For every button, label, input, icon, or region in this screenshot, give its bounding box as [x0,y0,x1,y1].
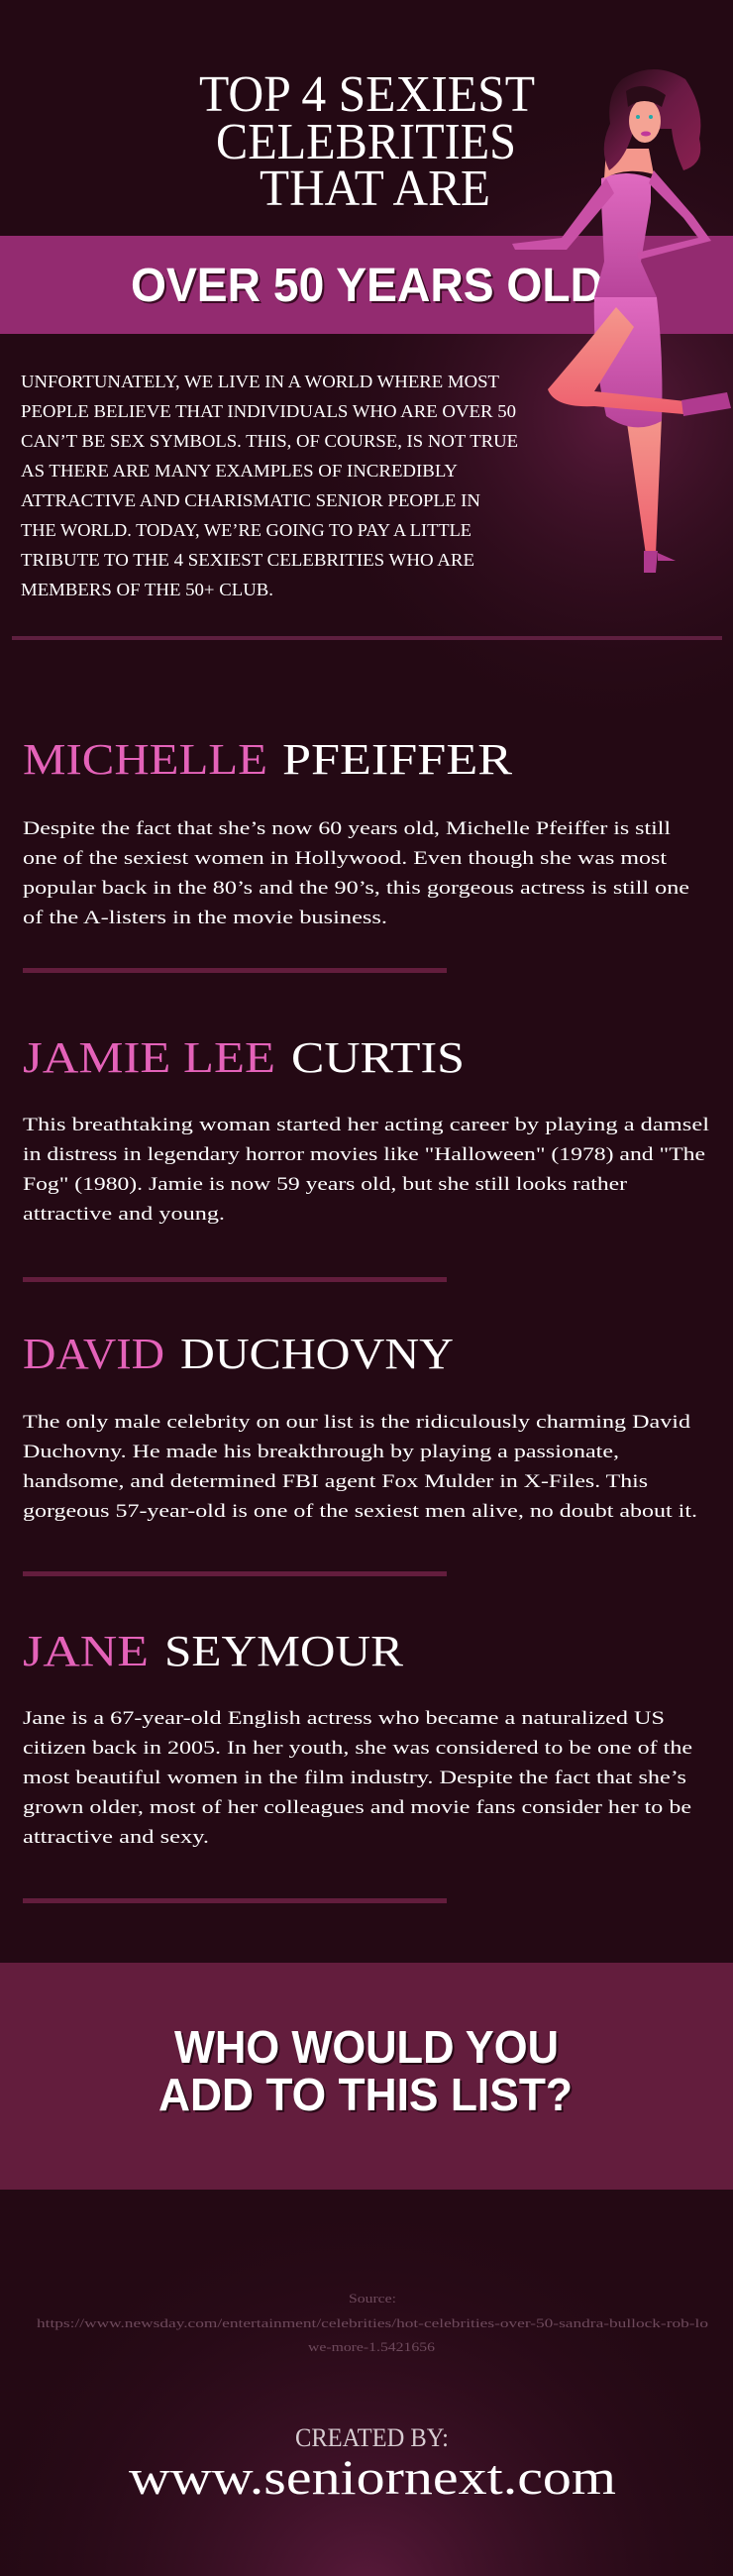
source: Source: [349,2291,396,2306]
body: Jane: most beautiful women in the film industry. Despite the fact that she’s [23,1768,686,1788]
section: Michelle Pfeiffer [23,735,689,928]
body: Jamie: Fog" (1980). Jamie is now 59 years old, but she still looks rather [23,1174,628,1195]
heading: Jamie Lee Curtis [23,1033,465,1082]
body: Jamie: in distress in legendary horror movies like "Halloween" (1978) and "The [23,1144,705,1165]
title: TOP 4 SEXIEST [199,66,535,123]
skirt [594,297,662,427]
chest skin [604,149,654,178]
body: Jane: grown older, most of her colleagues and movie fans consider her to be [23,1797,691,1818]
body: Jamie: attractive and young. [23,1204,225,1225]
subtitle band: OVER 50 YEARS OLD [131,260,603,312]
body: Jane [23,1708,692,1848]
section: Jane Seymour [23,1627,692,1848]
title: THAT ARE [260,161,490,217]
title: CELEBRITIES [216,114,516,170]
heading: Jane Seymour [23,1627,404,1675]
heading: Michelle Pfeiffer: PFEIFFER [282,735,513,784]
body: Michelle [23,818,689,928]
section: David Duchovny [23,1330,697,1522]
heading: David Duchovny: DUCHOVNY [180,1330,454,1378]
call to action band: WHO WOULD YOU [176,2023,561,2075]
right arm [637,170,711,260]
illustration: woman in pink dress [512,69,731,573]
body: Jamie: This breathtaking woman started her acting career by playing a damsel [23,1115,709,1135]
call to action band: WHO WOULD YOU [174,2021,559,2073]
left arm [512,178,614,250]
hair [604,69,700,170]
body: Jane: Jane is a 67-year-old English actress who became a naturalized US [23,1708,665,1729]
title [199,66,535,217]
subtitle band: OVER 50 YEARS OLD [133,262,605,314]
intro paragraph: ATTRACTIVE AND CHARISMATIC SENIOR PEOPLE IN [21,490,480,510]
body: Michelle: one of the sexiest women in Hollywood. Even though she was most [23,848,668,869]
call to action band: ADD TO THIS LIST? [158,2069,573,2120]
body: Michelle: of the A-listers in the movie business. [23,908,387,928]
bent leg [548,307,685,414]
section: Jamie Lee Curtis [23,1033,709,1225]
intro paragraph [21,372,518,599]
heading: Michelle Pfeiffer [23,735,513,784]
heading: Jane Seymour: SEYMOUR [164,1627,404,1675]
heading: David Duchovny: DAVID [23,1330,164,1378]
intro paragraph: THE WORLD. TODAY, WE’RE GOING TO PAY A LITTLE [21,520,471,540]
heading: Jamie Lee Curtis: JAMIE LEE [23,1033,275,1082]
intro paragraph: PEOPLE BELIEVE THAT INDIVIDUALS WHO ARE OVER 50 [21,401,516,421]
body: Michelle: Despite the fact that she’s now 60 years old, Michelle Pfeiffer is still [23,818,671,839]
credits: www.seniornext.com [129,2449,616,2505]
heading: David Duchovny [23,1330,454,1378]
body: Michelle: popular back in the 80’s and the 90’s, this gorgeous actress is still one [23,878,689,899]
standing leg [626,416,662,555]
intro paragraph: UNFORTUNATELY, WE LIVE IN A WORLD WHERE MOST [21,372,499,391]
subtitle band [0,236,733,334]
intro paragraph: AS THERE ARE MANY EXAMPLES OF INCREDIBLY [21,461,458,481]
intro paragraph: TRIBUTE TO THE 4 SEXIEST CELEBRITIES WHO ARE [21,550,474,570]
body: Jamie [23,1115,709,1225]
source [37,2291,708,2354]
credits: CREATED BY: [295,2423,449,2452]
body: David: gorgeous 57-year-old is one of the sexiest men alive, no doubt about it. [23,1501,697,1522]
body: David: handsome, and determined FBI agent Fox Mulder in X-Files. This [23,1471,648,1492]
heading: Jamie Lee Curtis: CURTIS [291,1033,465,1082]
source: we-more-1.5421656 [308,2339,436,2354]
torso [594,173,657,297]
body: Jane: attractive and sexy. [23,1827,209,1848]
body: David: The only male celebrity on our list is the ridiculously charming David [23,1412,691,1433]
face [629,99,661,143]
heading: Michelle Pfeiffer: MICHELLE [23,735,267,784]
heading: Jane Seymour: JANE [23,1627,149,1675]
body: David [23,1412,697,1522]
credits [129,2423,616,2505]
body: Jane: citizen back in 2005. In her youth, she was considered to be one of the [23,1738,692,1759]
intro paragraph: MEMBERS OF THE 50+ CLUB. [21,580,273,599]
call to action band [0,1963,733,2190]
call to action band: ADD TO THIS LIST? [160,2071,575,2122]
body: David: Duchovny. He made his breakthrough by playing a passionate, [23,1442,619,1462]
intro paragraph: CAN’T BE SEX SYMBOLS. THIS, OF COURSE, IS NOT TRUE [21,431,518,451]
source: https://www.newsday.com/entertainment/celebrities/hot-celebrities-over-50-sandra-bullock-rob-lo [37,2315,708,2330]
